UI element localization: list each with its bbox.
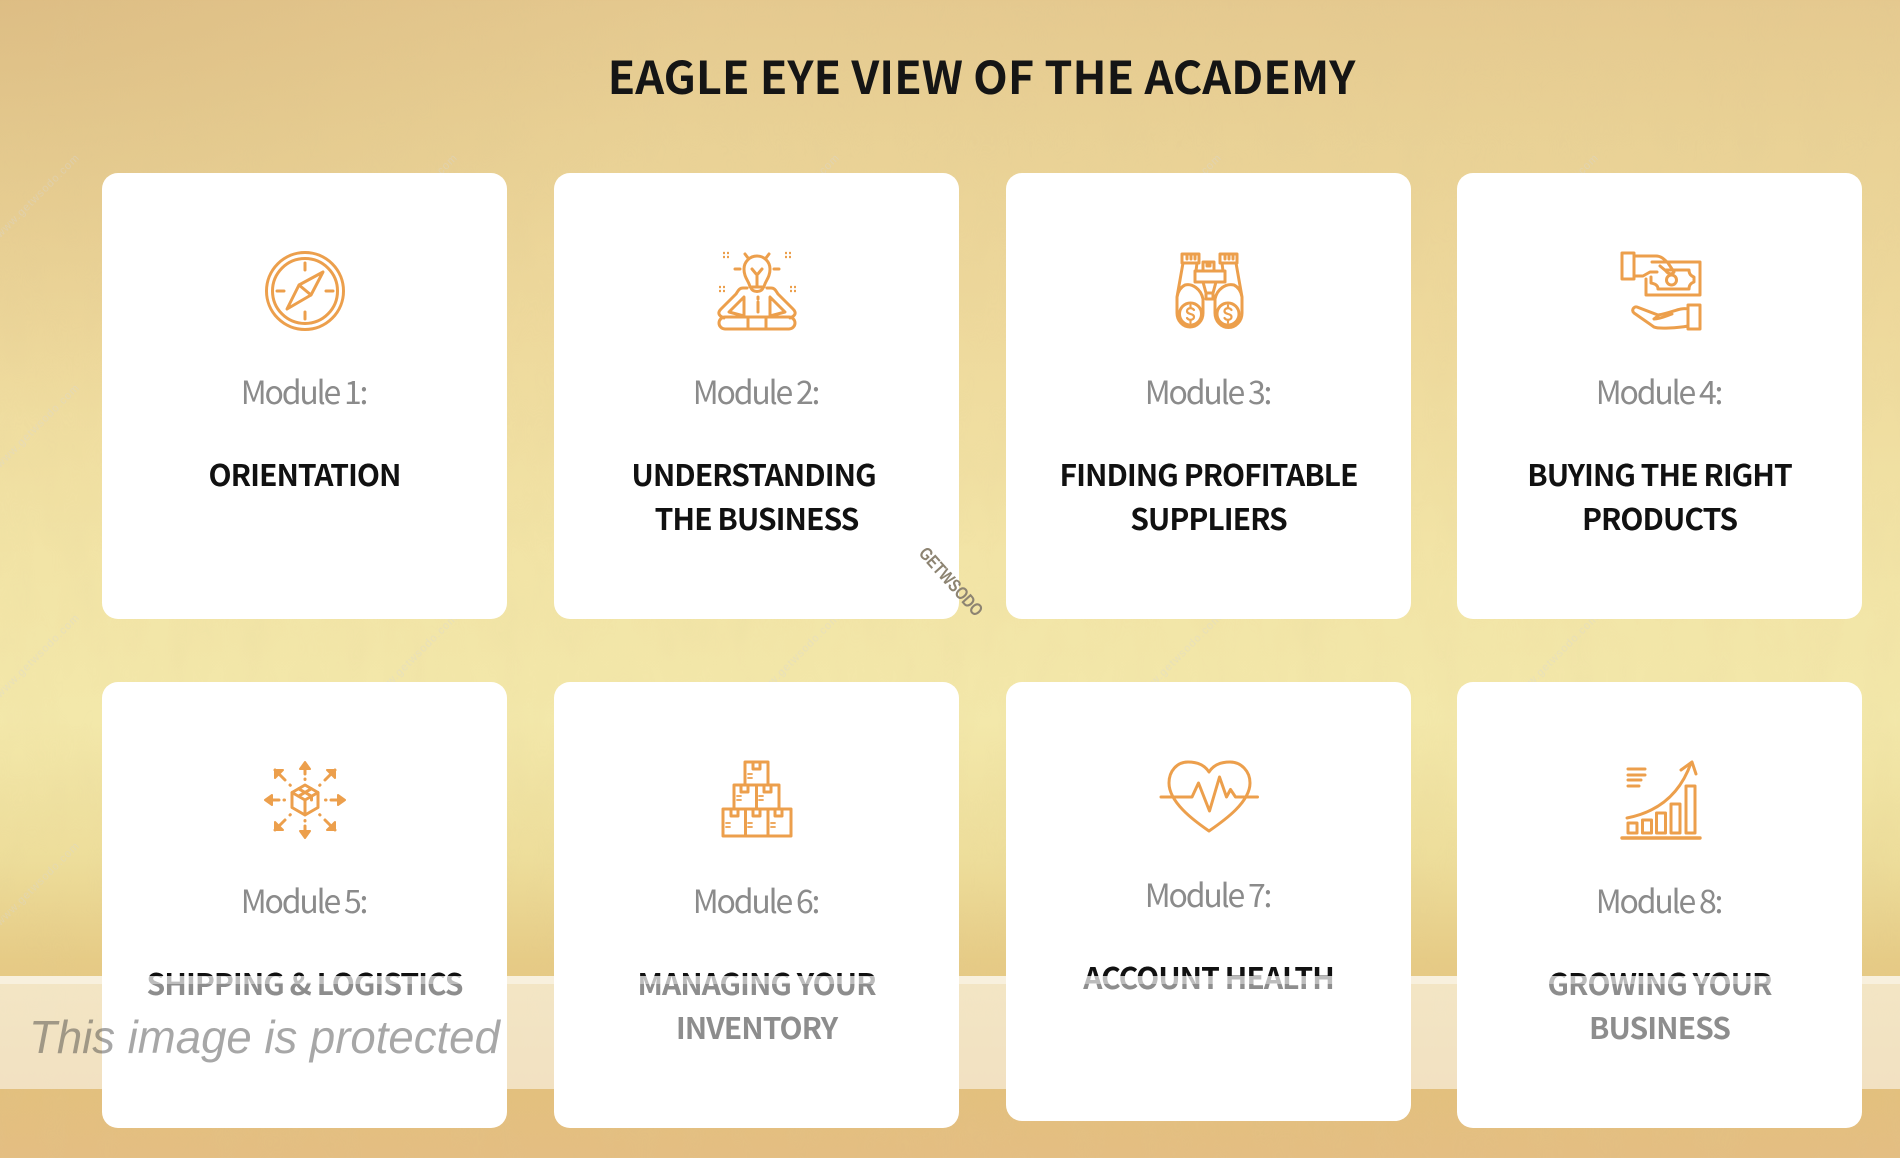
panel: module 2 (554, 173, 959, 619)
overlay band (0, 984, 1900, 1089)
module name: PRODUCTS (1582, 495, 1737, 539)
module name: INVENTORY (676, 1004, 837, 1048)
module name: SHIPPING & LOGISTICS (147, 960, 462, 1004)
module name (631, 451, 876, 539)
module name: GROWING YOUR (1548, 960, 1771, 1004)
module name (1548, 960, 1772, 1048)
background watermarks: www.getwsodo.com (754, 840, 842, 928)
panel: module 8 (1457, 682, 1862, 1128)
icon: binoculars with dollar signs (1176, 252, 1244, 329)
background watermarks: www.getwsodo.com (1136, 612, 1224, 700)
module label: Module 1: (241, 368, 366, 414)
background watermarks: www.getwsodo.com (1513, 152, 1601, 240)
panel: module 7 (1006, 682, 1411, 1121)
icon: heart with pulse (1160, 760, 1259, 832)
module name: FINDING PROFITABLE (1060, 451, 1357, 495)
module name: ORIENTATION (209, 451, 400, 495)
module name: ACCOUNT HEALTH (1083, 954, 1334, 998)
background watermarks: www.getwsodo.com (1136, 840, 1224, 928)
background watermarks: www.getwsodo.com (372, 152, 460, 240)
icon: growth chart (1620, 760, 1702, 840)
module name (637, 960, 876, 1048)
panel: module 6 (554, 682, 959, 1128)
module name: UNDERSTANDING (631, 451, 876, 495)
module name (1527, 451, 1792, 539)
protection notice: This image is protected (29, 1011, 500, 1063)
background watermarks: www.getwsodo.com (1513, 612, 1601, 700)
title: EAGLE EYE VIEW OF THE ACADEMY (608, 42, 1355, 107)
background watermarks: www.getwsodo.com (372, 612, 460, 700)
background watermarks: www.getwsodo.com (1136, 382, 1224, 470)
module label: Module 4: (1596, 368, 1721, 414)
module label: Module 3: (1145, 368, 1270, 414)
background watermarks: www.getwsodo.com (754, 612, 842, 700)
panel: module 3 (1006, 173, 1411, 619)
module name: MANAGING YOUR (637, 960, 876, 1004)
module label: Module 6: (693, 877, 818, 923)
background watermarks: www.getwsodo.com (1513, 840, 1601, 928)
panel: module 4 (1457, 173, 1862, 619)
background watermarks: www.getwsodo.com (372, 382, 460, 470)
module name (1060, 451, 1357, 539)
icon: compass (265, 251, 345, 331)
module name: BUSINESS (1589, 1004, 1730, 1048)
icon: meditating person with lightbulb (717, 252, 797, 330)
background watermarks: www.getwsodo.com (1513, 382, 1601, 470)
module name: THE BUSINESS (655, 495, 858, 539)
module name: SUPPLIERS (1130, 495, 1287, 539)
module label: Module 8: (1596, 877, 1721, 923)
background watermarks: www.getwsodo.com (754, 382, 842, 470)
module label: Module 5: (241, 877, 366, 923)
overlay strip (0, 976, 1900, 984)
background watermarks: www.getwsodo.com (1136, 152, 1224, 240)
module label: Module 7: (1145, 871, 1270, 917)
icon: hands exchanging money (1620, 252, 1702, 330)
corner watermark: GETWSODO (915, 543, 987, 620)
icon: box with arrows (264, 761, 346, 839)
module label: Module 2: (693, 368, 818, 414)
background watermarks: www.getwsodo.com (372, 840, 460, 928)
panel: module 1 (102, 173, 507, 619)
background watermarks: www.getwsodo.com (754, 152, 842, 240)
panel: module 5 (102, 682, 507, 1128)
module name: BUYING THE RIGHT (1527, 451, 1792, 495)
icon: stacked boxes (722, 760, 792, 838)
